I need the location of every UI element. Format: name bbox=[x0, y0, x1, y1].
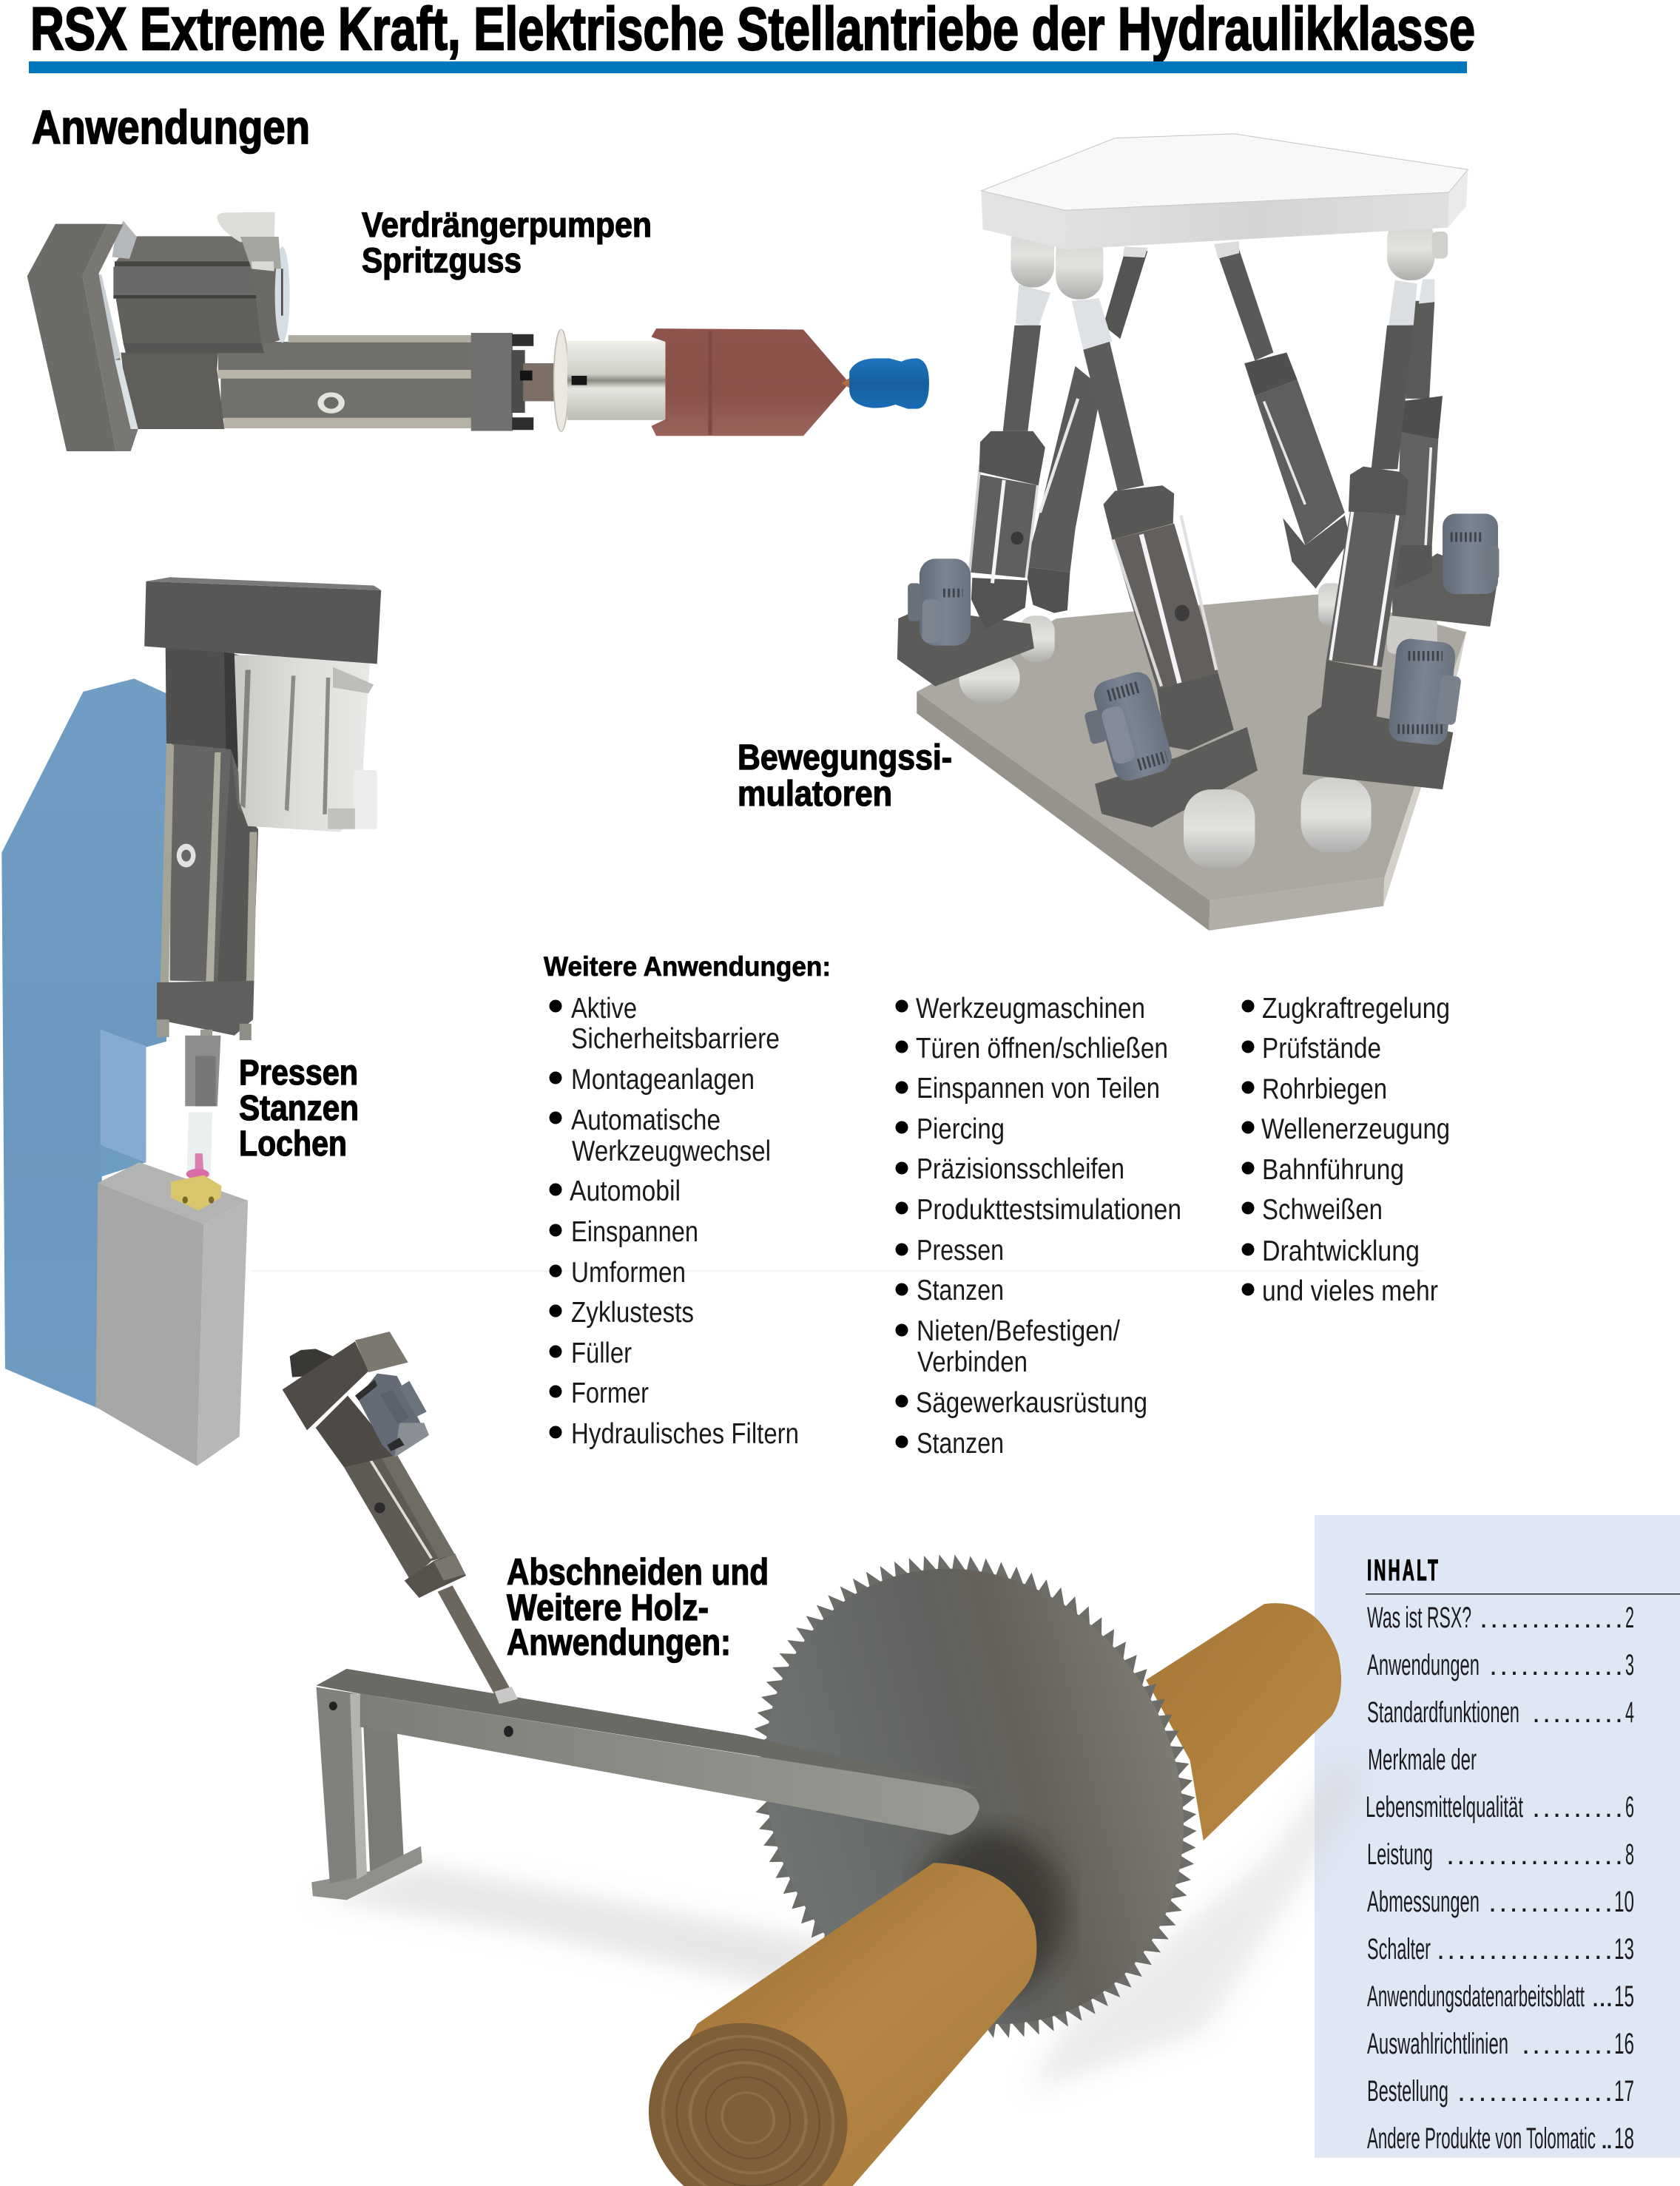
label: Abschneiden und Weitere Holz-Anwendungen: Weitere Holz- bbox=[507, 1587, 709, 1628]
list column 1: Sicherheitsbarriere bbox=[571, 1023, 780, 1055]
entry: 6 bbox=[1625, 1791, 1634, 1824]
illustration: saw and log bbox=[311, 1477, 1359, 2186]
front-centre actuator bbox=[1072, 298, 1258, 827]
list column 2: Pressen bbox=[917, 1235, 1004, 1266]
entry: 8 bbox=[1625, 1838, 1634, 1871]
list column 3: Schweißen bbox=[1262, 1194, 1383, 1226]
list column 2: Einspannen von Teilen bbox=[917, 1073, 1160, 1104]
list column 2: Produkttestsimulationen bbox=[917, 1194, 1181, 1226]
list column 3: Drahtwicklung bbox=[1262, 1235, 1420, 1267]
tube and front end bbox=[217, 328, 929, 436]
list column 2: Verbinden bbox=[917, 1346, 1028, 1378]
entry: Leistung bbox=[1367, 1838, 1433, 1871]
rear-right actuator bbox=[1392, 279, 1499, 627]
entry: Schalter bbox=[1367, 1933, 1431, 1966]
front supports bbox=[1184, 777, 1372, 868]
entry: 4 bbox=[1625, 1696, 1634, 1729]
entry: 18 bbox=[1614, 2122, 1634, 2155]
entry: ......... bbox=[1532, 1791, 1623, 1824]
rear-left actuator bbox=[1025, 249, 1147, 613]
entry: ......... bbox=[1522, 2028, 1613, 2060]
front-left actuator bbox=[897, 285, 1050, 687]
entry bbox=[1367, 1602, 1634, 1634]
illustration: press bbox=[1, 577, 381, 1466]
lever arm and stand bbox=[311, 1669, 979, 1900]
list column 1: Former bbox=[571, 1377, 649, 1409]
log end grain bbox=[627, 2008, 868, 2186]
subheading: Weitere Anwendungen: bbox=[544, 951, 831, 982]
entry bbox=[1367, 1838, 1634, 1871]
entry: 13 bbox=[1614, 1933, 1634, 1966]
label: Pressen Stanzen Lochen: Pressen bbox=[239, 1053, 358, 1093]
entry: ................. bbox=[1446, 1838, 1623, 1871]
label: Abschneiden und Weitere Holz-Anwendungen bbox=[507, 1551, 769, 1663]
list column 2: Stanzen bbox=[917, 1428, 1004, 1460]
list column 3: Bahnführung bbox=[1262, 1154, 1404, 1186]
list column 1: Montageanlagen bbox=[571, 1064, 755, 1096]
label: Pressen Stanzen Lochen bbox=[239, 1053, 359, 1164]
label: Bewegungssimulatoren: Bewegungssi- bbox=[738, 738, 952, 777]
entry: Bestellung bbox=[1367, 2075, 1448, 2108]
platform supports bbox=[1011, 217, 1448, 300]
blade shadow at log bbox=[917, 1829, 1065, 1996]
list column 1: Werkzeugwechsel bbox=[572, 1136, 771, 1167]
entry: 3 bbox=[1625, 1649, 1634, 1681]
label: Bewegungssimulatoren: mulatoren bbox=[738, 775, 892, 814]
label: Abschneiden und Weitere Holz-Anwendungen: Abschneiden und bbox=[507, 1551, 769, 1593]
list column 2: Werkzeugmaschinen bbox=[916, 993, 1145, 1025]
label: Pressen Stanzen Lochen: Stanzen bbox=[239, 1089, 359, 1128]
list column 2 bbox=[895, 993, 1181, 1460]
list column 2: Sägewerkausrüstung bbox=[916, 1387, 1147, 1419]
illustration: pump actuator bbox=[27, 212, 929, 451]
list column 1: Automatische bbox=[571, 1104, 721, 1136]
entry: 10 bbox=[1614, 1886, 1634, 1918]
entry: 2 bbox=[1625, 1602, 1634, 1634]
entry: Auswahlrichtlinien bbox=[1367, 2028, 1508, 2060]
entry: ............. bbox=[1489, 1649, 1623, 1681]
rear-centre actuator bbox=[1123, 241, 1350, 589]
illustration: inclined actuator bbox=[283, 1332, 518, 1704]
entry: 17 bbox=[1614, 2075, 1634, 2108]
motor and mounting plate bbox=[27, 212, 290, 451]
entry: .............. bbox=[1480, 1602, 1623, 1634]
panel: table of contents background bbox=[1315, 1515, 1680, 2158]
heading: INHALT: INHALT bbox=[1367, 1554, 1440, 1587]
list column 2: Türen öffnen/schließen bbox=[916, 1033, 1168, 1065]
list column 2: Piercing bbox=[917, 1113, 1005, 1145]
entry: .. bbox=[1600, 2122, 1613, 2155]
entry: Anwendungen bbox=[1367, 1649, 1480, 1681]
list column 1: Hydraulisches Filtern bbox=[571, 1418, 799, 1450]
list column 3: Zugkraftregelung bbox=[1262, 993, 1450, 1025]
list column 1: Automobil bbox=[570, 1175, 681, 1207]
floor shadow bbox=[320, 1750, 1359, 2093]
list column 2: Präzisionsschleifen bbox=[917, 1153, 1124, 1185]
front-right actuator bbox=[1303, 280, 1462, 789]
label: Verdrängerpumpen Spritzguss: Spritzguss bbox=[362, 240, 522, 280]
label: Verdrängerpumpen Spritzguss: Verdrängerpumpen bbox=[362, 205, 652, 244]
illustration: hexapod motion simulator bbox=[897, 134, 1499, 931]
front log bbox=[627, 1863, 1036, 2186]
entry: ................. bbox=[1437, 1933, 1613, 1966]
entry: Lebensmittelqualität bbox=[1366, 1791, 1523, 1824]
entry: ......... bbox=[1532, 1696, 1623, 1729]
entry: Standardfunktionen bbox=[1367, 1696, 1519, 1729]
saw blade bbox=[652, 1477, 1283, 2115]
entry: 15 bbox=[1614, 1980, 1634, 2013]
list column 3: und vieles mehr bbox=[1262, 1275, 1438, 1307]
entry bbox=[1367, 2075, 1634, 2108]
list column 1: Aktive bbox=[571, 993, 637, 1025]
entry: 16 bbox=[1614, 2028, 1634, 2060]
rear log bbox=[1146, 1603, 1341, 1841]
list column 1: Füller bbox=[571, 1337, 632, 1369]
entry bbox=[1367, 1933, 1634, 1966]
entry: Abmessungen bbox=[1367, 1886, 1480, 1918]
label: Verdrängerpumpen Spritzguss bbox=[362, 205, 652, 280]
entry: ............... bbox=[1457, 2075, 1613, 2108]
list column 2: Stanzen bbox=[917, 1275, 1004, 1306]
list column 1: Einspannen bbox=[571, 1216, 698, 1248]
title rule bbox=[29, 61, 1467, 73]
list column 3: Prüfstände bbox=[1262, 1033, 1381, 1065]
label: Bewegungssimulatoren bbox=[738, 738, 952, 814]
entry: Merkmale der bbox=[1368, 1744, 1477, 1776]
list column 1: Umformen bbox=[571, 1257, 686, 1289]
base plate bbox=[917, 594, 1466, 931]
list column 3 bbox=[1241, 993, 1450, 1307]
label: Pressen Stanzen Lochen: Lochen bbox=[239, 1124, 347, 1164]
table of contents bbox=[1366, 1554, 1680, 2155]
top platform bbox=[981, 134, 1468, 249]
rear supports bbox=[959, 583, 1437, 703]
entry: Was ist RSX? bbox=[1367, 1602, 1471, 1634]
entry: ... bbox=[1591, 1980, 1613, 2013]
list column 2: Nieten/Befestigen/ bbox=[917, 1315, 1120, 1347]
entry: ............ bbox=[1488, 1886, 1613, 1918]
list column 3: Wellenerzeugung bbox=[1261, 1113, 1450, 1145]
list column 1: Zyklustests bbox=[571, 1297, 694, 1329]
label: Abschneiden und Weitere Holz-Anwendungen: Anwendungen: bbox=[507, 1622, 731, 1663]
further applications list bbox=[544, 951, 1450, 1460]
list column 1 bbox=[549, 993, 799, 1450]
heading: Anwendungen: Anwendungen bbox=[32, 101, 310, 154]
list column 3: Rohrbiegen bbox=[1262, 1073, 1387, 1105]
